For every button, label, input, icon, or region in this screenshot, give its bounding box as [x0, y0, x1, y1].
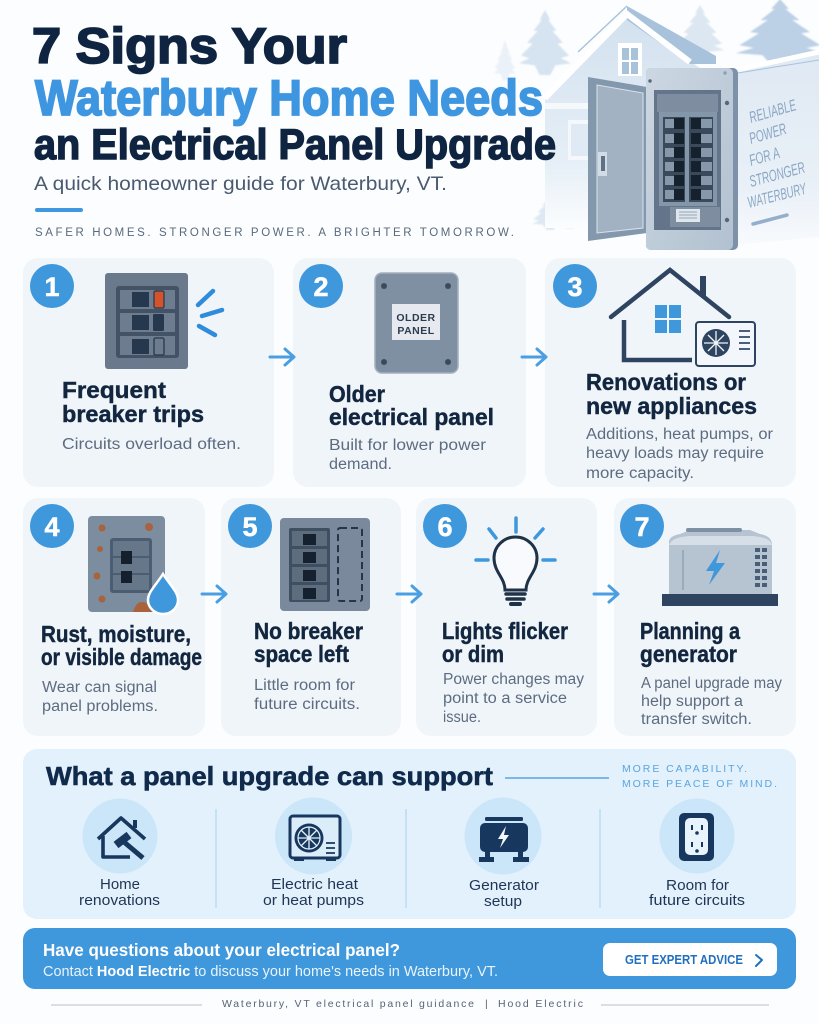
icon: panel with tripped breaker: [105, 273, 222, 369]
tagline: SAFER HOMES. STRONGER POWER. A BRIGHTER TOMORROW.: [35, 227, 514, 239]
description: demand.: [329, 456, 392, 473]
accent bar: [35, 208, 83, 212]
label: or heat pumps: [263, 892, 364, 909]
trees background: [494, 0, 819, 230]
arrow 4 to 5: [202, 586, 226, 602]
description: A panel upgrade may: [641, 675, 782, 692]
icon: generator: [662, 528, 778, 606]
description: Additions, heat pumps, or: [586, 426, 773, 443]
side note: MORE CAPABILITY.: [622, 763, 747, 775]
panel side wall with slogan: FOR A: [747, 145, 782, 170]
item: electric heat: [263, 798, 364, 909]
side note: MORE PEACE OF MIND.: [622, 778, 777, 790]
icon: rusted panel with water drop: [88, 516, 178, 614]
description: issue.: [443, 709, 481, 726]
badge 4: 4: [44, 512, 60, 542]
section heading: What a panel upgrade can support: [46, 761, 493, 791]
label: Generator: [469, 877, 539, 894]
heading: Frequent: [62, 377, 166, 403]
heading: Older: [329, 381, 385, 407]
panel: sign 1: [23, 258, 274, 487]
description: more capacity.: [586, 465, 694, 482]
panel side wall with slogan: POWER: [747, 121, 789, 148]
icon: house with heat pump: [611, 270, 755, 366]
panel cabinet: [646, 68, 738, 250]
heading: Renovations or: [586, 369, 746, 395]
badge 2: [299, 264, 343, 308]
heading: new appliances: [586, 393, 757, 419]
description: transfer switch.: [641, 711, 752, 728]
badge 7: 7: [634, 512, 650, 542]
badge 2: 2: [313, 272, 329, 302]
item: home renovations: [79, 798, 160, 909]
panel: sign 4: [23, 498, 205, 736]
cta heading: Have questions about your electrical panel?: [43, 940, 400, 960]
badge 6: 6: [437, 512, 453, 542]
heading: or visible damage: [41, 644, 202, 670]
arrow 5 to 6: [397, 586, 421, 602]
title: 7 Signs Your: [32, 18, 347, 74]
heading: Lights flicker: [442, 618, 568, 644]
open door: [588, 77, 647, 241]
heading: or dim: [442, 641, 504, 667]
label: setup: [484, 893, 522, 910]
icon: older panel: PANEL: [397, 325, 435, 337]
description: Power changes may: [443, 671, 584, 688]
hero illustration: house and electrical panel: [494, 0, 819, 250]
label: Home: [100, 876, 140, 893]
panel: sign 3: [545, 258, 796, 487]
arrow 1 to 2: [270, 349, 294, 365]
description: Built for lower power: [329, 437, 486, 454]
footer: Hood Electric: [498, 998, 583, 1010]
panel side wall with slogan: [736, 52, 819, 245]
description: point to a service: [443, 690, 567, 707]
panel: sign 5: [221, 498, 401, 736]
panel: sign 7: [614, 498, 796, 736]
badge 7: [620, 504, 664, 548]
cta text: Contact Hood Electric to discuss your home's needs in Waterbury, VT.: [43, 963, 498, 980]
description: Little room for: [254, 677, 355, 694]
heading: Planning a: [640, 618, 740, 644]
badge 4: [30, 504, 74, 548]
icon: older panel: [375, 273, 458, 373]
label: renovations: [79, 892, 160, 909]
badge 3: [553, 264, 597, 308]
arrow 2 to 3: [522, 349, 546, 365]
description: Circuits overload often.: [62, 436, 241, 453]
call to action banner: [23, 928, 796, 989]
subtitle: A quick homeowner guide for Waterbury, VT.: [34, 173, 447, 195]
icon: older panel: OLDER: [396, 312, 436, 324]
button: [603, 943, 777, 976]
badge 5: [228, 504, 272, 548]
label: Electric heat: [271, 876, 359, 893]
badge 1: 1: [44, 272, 60, 302]
badge 6: [423, 504, 467, 548]
description: help support a: [641, 693, 743, 710]
description: Wear can signal: [42, 679, 157, 696]
house: [545, 6, 716, 228]
footer: Waterbury, VT electrical panel guidance: [222, 998, 474, 1010]
badge 5: 5: [242, 512, 258, 542]
heading: electrical panel: [329, 404, 494, 430]
icon: light bulb: [476, 518, 555, 604]
panel: sign 6: [416, 498, 597, 736]
title: Waterbury Home Needs: [35, 70, 543, 126]
item: room for future circuits: [649, 798, 745, 909]
badge 1: [30, 264, 74, 308]
footer: [222, 998, 583, 1010]
panel: what an upgrade can support: [23, 749, 796, 919]
label: future circuits: [649, 892, 745, 909]
description: heavy loads may require: [586, 445, 764, 462]
heading: generator: [640, 641, 737, 667]
side note: [622, 763, 777, 790]
heading: space left: [254, 641, 349, 667]
panel: sign 2: [293, 258, 526, 487]
description: panel problems.: [42, 698, 158, 715]
heading: breaker trips: [62, 401, 204, 427]
heading: No breaker: [254, 618, 363, 644]
button: GET EXPERT ADVICE: [625, 952, 743, 967]
footer: |: [485, 998, 488, 1010]
icon: full breaker panel with dashed space: [280, 518, 370, 611]
heading: Rust, moisture,: [41, 621, 191, 647]
title: an Electrical Panel Upgrade: [34, 121, 556, 169]
description: future circuits.: [254, 696, 360, 713]
title: [32, 18, 556, 169]
badge 3: 3: [567, 272, 583, 302]
item: generator setup: [464, 798, 542, 910]
arrow 6 to 7: [594, 586, 618, 602]
label: Room for: [666, 877, 729, 894]
